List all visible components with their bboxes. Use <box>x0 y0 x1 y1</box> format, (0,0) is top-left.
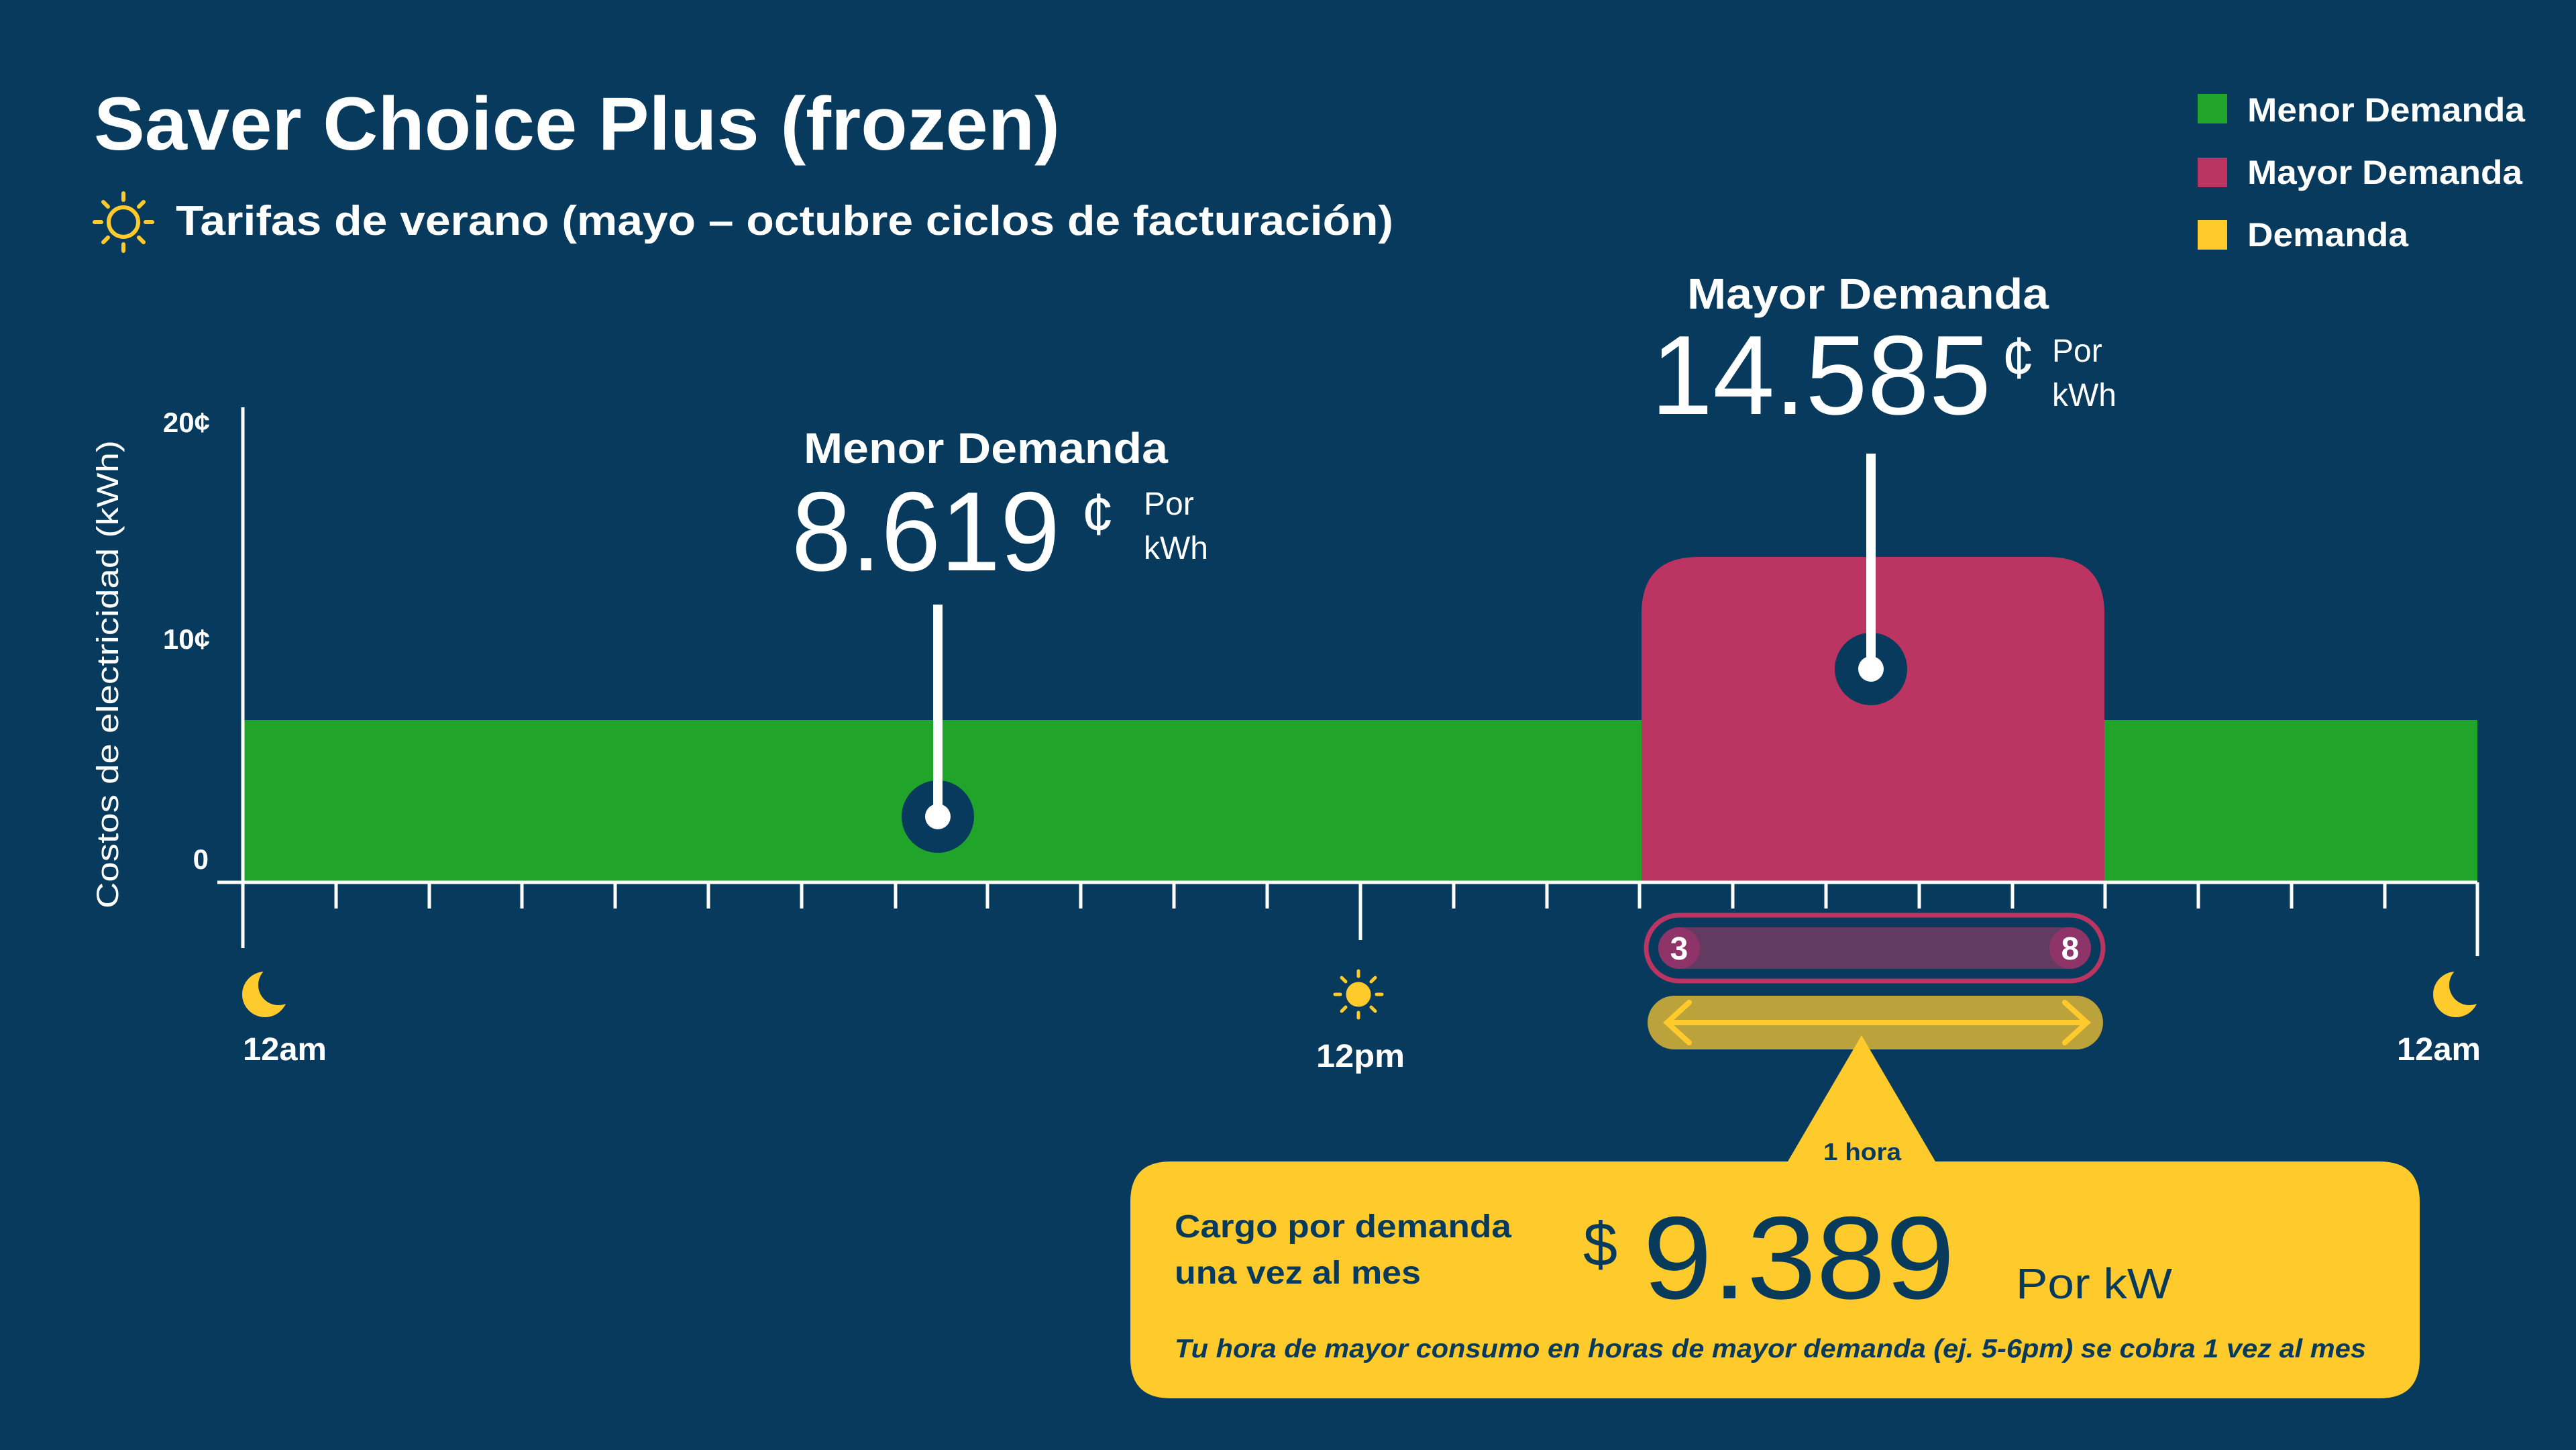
y axis labels: 10¢ <box>163 623 210 655</box>
icon: moon right <box>2433 965 2489 1017</box>
x axis labels: 12pm <box>1316 1039 1405 1074</box>
marker: menor demanda pin <box>902 605 974 853</box>
label: menor demanda rate: Por <box>1144 486 1194 522</box>
demand range arrow <box>1648 996 2103 1049</box>
axes <box>217 407 2477 956</box>
title: Saver Choice Plus (frozen) <box>94 82 1060 166</box>
y axis labels <box>163 407 210 875</box>
marker: mayor demanda pin <box>1835 454 1907 705</box>
peak hours range 3-8: 3 <box>1670 931 1688 967</box>
callout: demand charge: $ <box>1583 1210 1617 1279</box>
label: mayor demanda rate: Mayor Demanda <box>1687 270 2049 318</box>
label: menor demanda rate: Menor Demanda <box>804 424 1168 472</box>
peak hours range 3-8: 8 <box>2061 931 2079 967</box>
legend: Demanda <box>2247 216 2409 254</box>
callout: demand charge: 9.389 <box>1643 1193 1955 1324</box>
peak hours range 3-8 <box>1646 915 2103 981</box>
callout: demand charge: una vez al mes <box>1175 1255 1421 1291</box>
legend: Mayor Demanda <box>2247 154 2523 191</box>
x axis labels <box>243 1032 2481 1074</box>
label: mayor demanda rate: 14.585 <box>1651 312 1991 438</box>
y axis labels: 20¢ <box>163 407 210 438</box>
subtitle with sun icon: Tarifas de verano (mayo – octubre ciclos de facturación) <box>176 198 1393 244</box>
icon: sun <box>95 193 152 251</box>
callout: demand charge: Tu hora de mayor consumo en horas de mayor demanda (ej. 5-6pm) se cobra 1 vez al mes <box>1175 1335 2366 1363</box>
x axis labels: 12am <box>2397 1032 2481 1068</box>
icon: sun noon <box>1335 971 1382 1018</box>
chart: green off-peak band <box>243 720 2477 882</box>
label: mayor demanda rate: kWh <box>2052 378 2116 413</box>
label: menor demanda rate <box>792 424 1208 594</box>
callout: demand charge: Por kW <box>2016 1259 2173 1308</box>
legend: Menor Demanda <box>2247 91 2526 129</box>
label: mayor demanda rate: Por <box>2052 333 2102 369</box>
y axis labels: 0 <box>193 843 209 875</box>
callout: demand charge: Cargo por demanda <box>1175 1209 1511 1245</box>
label: mayor demanda rate <box>1651 270 2116 438</box>
label: menor demanda rate: ¢ <box>1081 480 1114 547</box>
callout: demand charge <box>1130 1035 2420 1398</box>
label: menor demanda rate: 8.619 <box>792 468 1060 594</box>
callout: demand charge: 1 hora <box>1823 1138 1902 1166</box>
subtitle with sun icon <box>95 193 1393 251</box>
label: mayor demanda rate: ¢ <box>2002 324 2035 391</box>
chart: pink peak block <box>1642 557 2104 882</box>
legend <box>2198 91 2526 254</box>
label: menor demanda rate: kWh <box>1144 531 1208 566</box>
x axis labels: 12am <box>243 1032 327 1068</box>
y axis title: Costos de electricidad (kWh) <box>91 440 125 909</box>
icon: moon left <box>242 965 299 1017</box>
